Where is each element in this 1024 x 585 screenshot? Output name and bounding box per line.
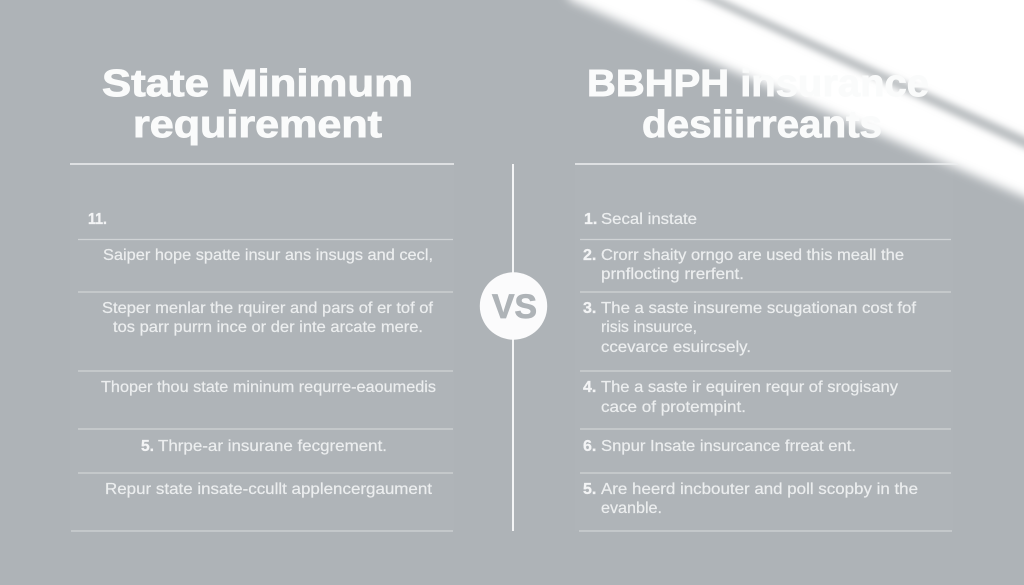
- item 3: [583, 300, 917, 356]
- panel: state minimum: [70, 63, 454, 531]
- item 3: ccevarce esuircsely.: [601, 339, 751, 356]
- heading: state minimum: [102, 63, 413, 146]
- item 3: 3.: [583, 300, 596, 317]
- item 5: Are heerd incbouter and poll scopby in the: [601, 481, 918, 498]
- item 2: Crorr shaity orngo are used this meall the: [601, 247, 904, 264]
- item 2: [583, 247, 904, 283]
- item 4: [583, 379, 898, 416]
- row 3: tos parr purrn ince or der inte arcate mere.: [113, 319, 423, 336]
- item 1: 1.: [584, 211, 597, 228]
- row 6: Repur state insate-ccullt applencergaument: [105, 481, 433, 498]
- light streak overlay: [555, 0, 1024, 212]
- heading: BBHPH insurance: [587, 63, 929, 146]
- VS badge: [480, 272, 547, 340]
- heading: state minimum: requirement: [133, 104, 382, 146]
- item 4: cace of protempint.: [601, 399, 746, 416]
- row 4: Thoper thou state mininum requrre-eaoumedis: [101, 379, 436, 396]
- item 1: Secal instate: [601, 211, 697, 228]
- item 5: [583, 481, 918, 517]
- item 5: 5.: [583, 481, 596, 498]
- item 6: Snpur Insate insurcance frreat ent.: [601, 438, 856, 455]
- heading: BBHPH insurance: BBHPH insurance: [587, 63, 929, 105]
- heading: BBHPH insurance: desiiirreants: [642, 104, 882, 146]
- item 3: The a saste insureme scugationan cost fof: [601, 300, 917, 317]
- row 3: [102, 300, 434, 336]
- center divider: [512, 164, 514, 531]
- row 5: Thrpe-ar insurane fecgrement.: [158, 438, 387, 455]
- row 5: 5.: [141, 438, 154, 455]
- VS badge: VS: [492, 288, 537, 326]
- item 5: evanble.: [601, 500, 662, 517]
- item 6: 6.: [583, 438, 596, 455]
- row 2: Saiper hope spatte insur ans insugs and cecl,: [103, 247, 433, 264]
- row 1: 11.: [88, 211, 107, 228]
- panel: BHPH insurance: [575, 63, 958, 531]
- item 4: The a saste ir equiren requr of srogisany: [601, 379, 898, 396]
- item 4: 4.: [583, 379, 596, 396]
- heading: state minimum: State Minimum: [102, 63, 413, 105]
- item 3: risis insuurce,: [601, 319, 697, 336]
- row 3: Steper menlar the rquirer and pars of er tof of: [102, 300, 434, 317]
- item 2: prnflocting rrerfent.: [601, 266, 744, 283]
- item 2: 2.: [583, 247, 596, 264]
